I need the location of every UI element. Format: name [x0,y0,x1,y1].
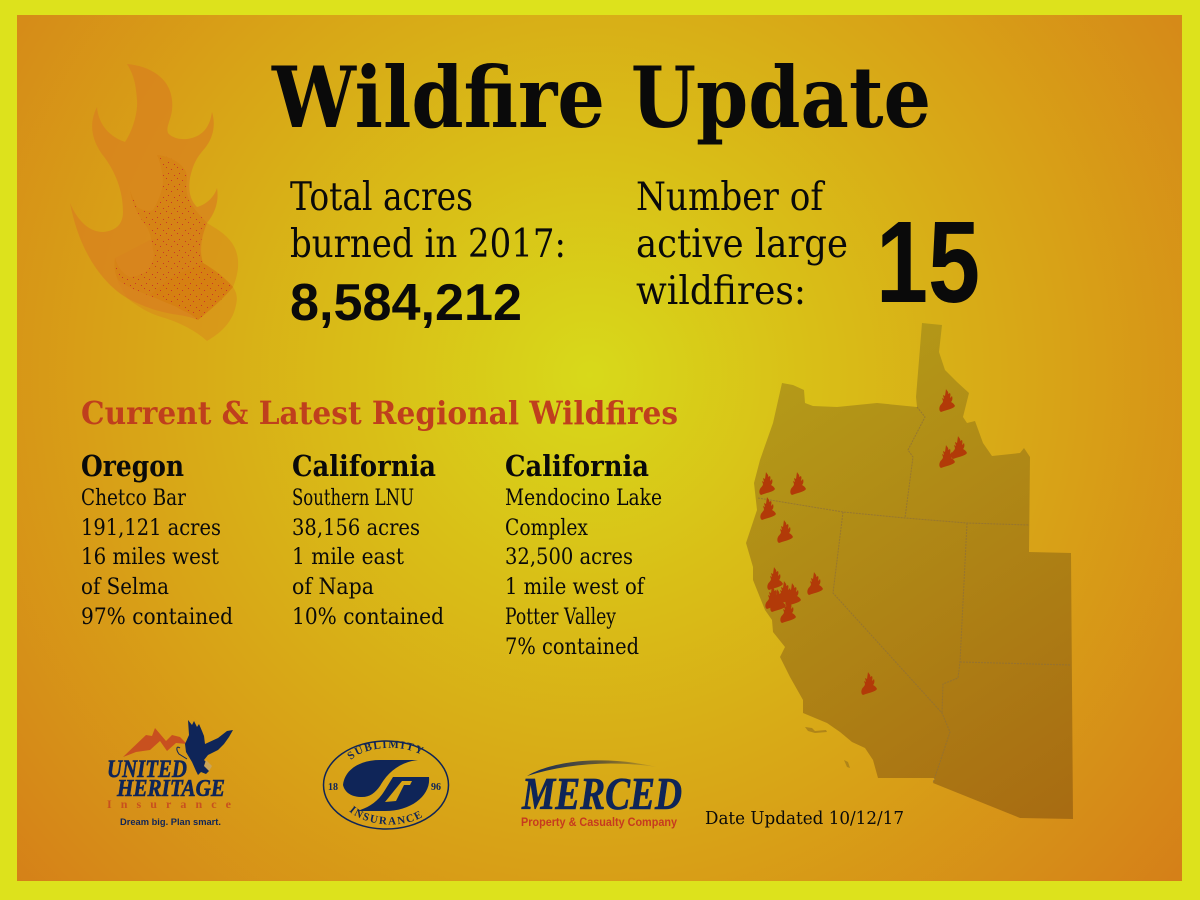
text block: Oregon: Chetco Bar [81,486,186,511]
stat: active large wildfires: active large [636,222,848,267]
text block: California Southern LNU: 10% contained [292,605,444,630]
text block: California Mendocino Lake: 7% contained [505,635,639,660]
stat: active large wildfires [636,175,980,327]
logo: United Heritage Insurance: Dream big. Plan smart. [120,817,221,828]
logo: Sublimity Insurance: 96 [431,782,441,793]
stat: active large wildfires: wildfires: [636,269,806,314]
icon: large flame [70,64,238,341]
stat: total acres burned: burned in 2017: [290,222,566,267]
map: western US states [746,323,1073,819]
text block: California Southern LNU: of Napa [292,575,374,600]
text block: California Southern LNU: Southern LNU [292,486,414,511]
logo: United Heritage Insurance: Insurance [107,797,232,811]
text block: Oregon: Oregon [81,449,184,483]
text block: Oregon: 191,121 acres [81,516,221,541]
map markers: active fires [759,389,967,695]
logo: United Heritage Insurance: HERITAGE [116,776,225,802]
text block: California Southern LNU: California [292,449,436,483]
stat: active large wildfires: 15 [876,197,980,327]
logo: Sublimity Insurance: 18 [328,782,338,793]
text block: California Southern LNU [292,449,444,630]
text block: Oregon: 97% contained [81,605,233,630]
logo: Merced Property & Casualty Company: Property & Casualty Company [521,815,677,829]
text block: California Southern LNU: 1 mile east [292,545,404,570]
logo: Merced Property & Casualty Company [521,760,682,829]
text block: California Mendocino Lake [505,449,662,660]
logo: Sublimity Insurance: SUBLIMITY [348,740,424,760]
stat: total acres burned [290,175,566,332]
stat: total acres burned: 8,584,212 [290,274,522,332]
text block: California Mendocino Lake: California [505,449,649,483]
text block: Oregon [81,449,233,630]
logo: United Heritage Insurance [107,720,233,828]
text block: California Mendocino Lake: 1 mile west of [505,575,646,600]
text block: California Mendocino Lake: 32,500 acres [505,545,633,570]
logo: United Heritage Insurance: UNITED [107,756,187,783]
text block: Oregon: 16 miles west [81,545,219,570]
text block: California Mendocino Lake: Mendocino Lake [505,486,662,511]
title: Wildfire Update [271,48,931,147]
text block: California Mendocino Lake: Complex [505,516,588,541]
logo: Sublimity Insurance [322,740,450,830]
logo: Sublimity Insurance: INSURANCE [349,806,422,824]
logo: Merced Property & Casualty Company: MERCED [521,769,682,819]
date updated: Date Updated 10/12/17 [705,808,904,829]
text block: California Southern LNU: 38,156 acres [292,516,420,541]
text block: Oregon: of Selma [81,575,169,600]
text block: California Mendocino Lake: Potter Valley [505,605,616,630]
stat: total acres burned: Total acres [290,175,473,220]
heading: regional wildfires: Current & Latest Regional Wildfires [81,394,678,432]
stat: active large wildfires: Number of [636,175,825,220]
